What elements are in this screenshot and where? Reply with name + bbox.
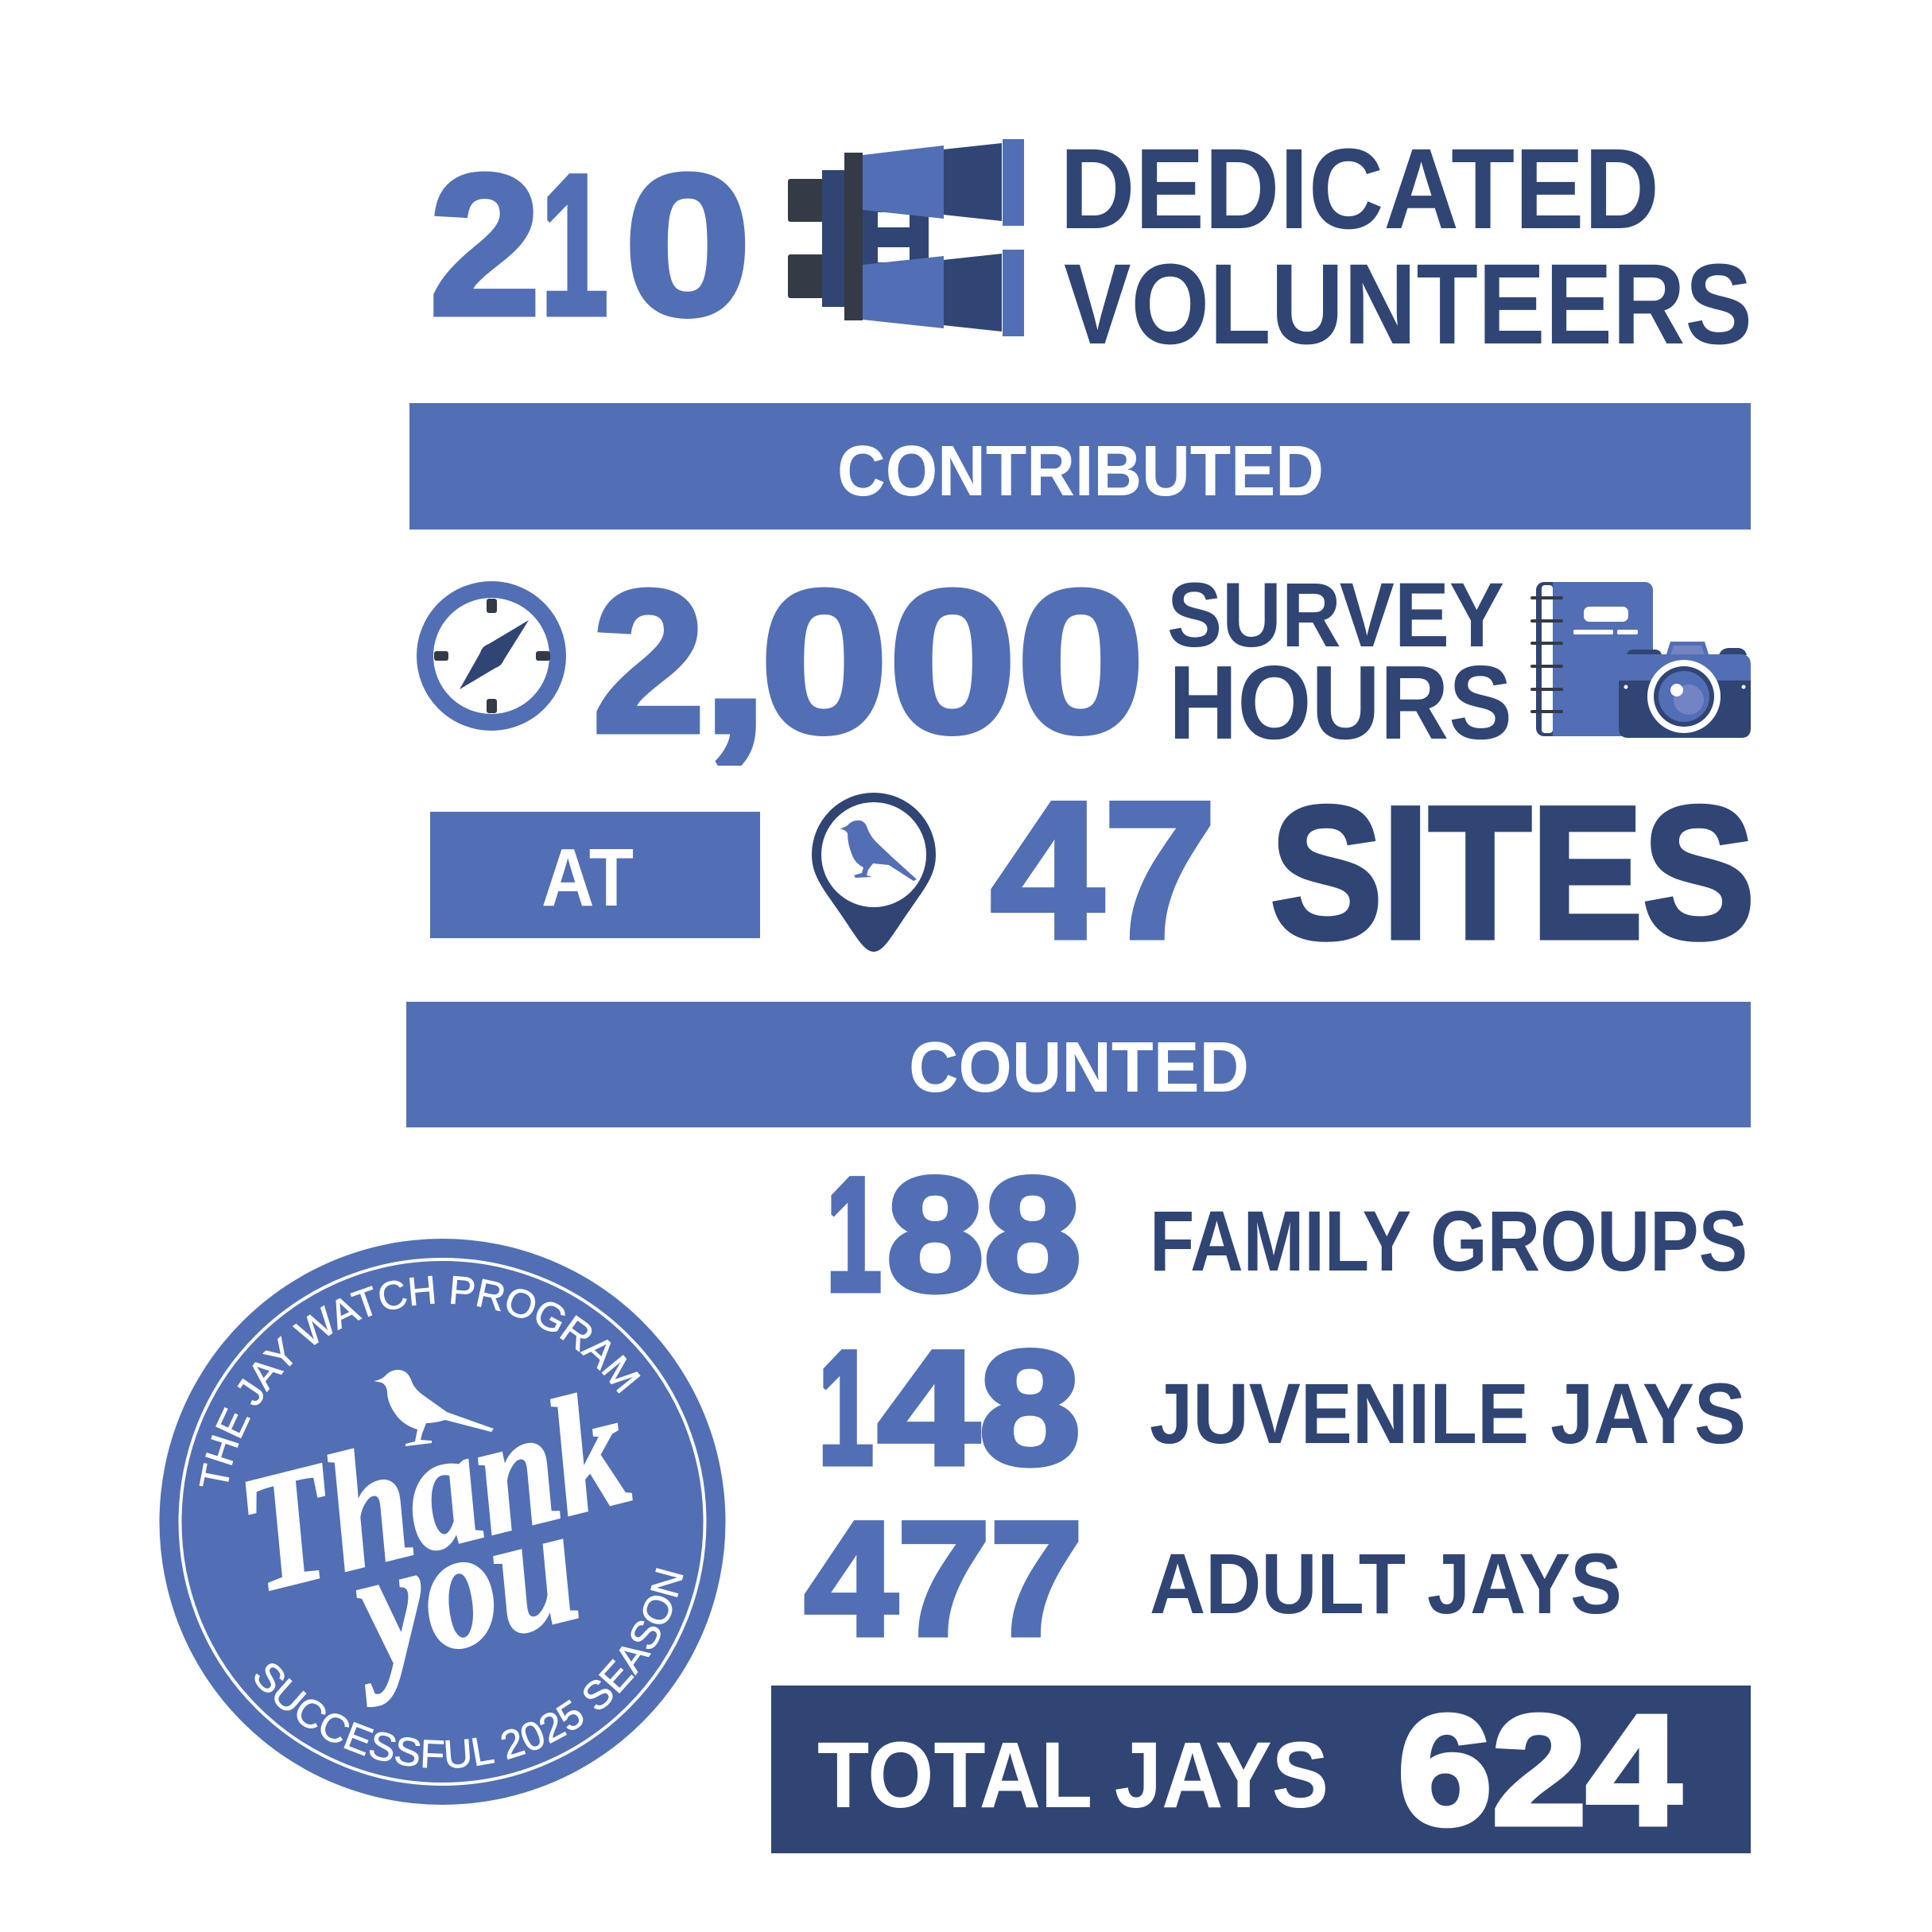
label: survey hours: HOURS [1169,644,1512,761]
script: thank: Thank [223,1355,646,1628]
label: survey hours [1167,564,1512,761]
icon: compass [425,590,558,722]
seal text: successful 2025 season: SUCCESSFUL 2025 SEASON [254,1568,684,1768]
number: 47: 47 [991,761,1216,979]
label: survey hours: SURVEY [1167,564,1504,666]
number: 2,000: 000 [760,549,1145,775]
icon: binoculars [788,139,1024,336]
banner: total jays: TOTAL JAYS [817,1723,1329,1828]
stat: juvenile jays: JUVENILE JAYS [1150,1365,1746,1461]
banner: contributed [409,403,1751,530]
stat: adult jays [805,1488,1622,1670]
number: 210 [429,134,751,357]
banner: total jays [771,1683,1751,1857]
number: 210: 0 [624,134,751,357]
icon: bird silhouette [374,1370,494,1446]
icon: location pin with bird [812,793,936,952]
stat: adult jays: ADULT JAYS [1150,1535,1622,1631]
badge: thank you seal [159,1239,725,1805]
label: dedicated volunteers: DEDICATED [1060,125,1659,253]
icon: notebook [1532,582,1653,736]
banner: counted [406,1002,1751,1127]
panel: volunteers row [429,125,1752,368]
stat: family groups: 88 [886,1144,1081,1325]
stat: family groups: 1 [826,1144,882,1325]
banner: contributed: CONTRIBUTED [837,432,1324,511]
panel: sites row [430,761,1755,979]
panel: survey hours row [425,549,1751,775]
number: 210: 2 [429,134,541,357]
banner: total jays: 624 [1398,1683,1681,1857]
number: 2,000 [592,549,1145,775]
label: dedicated volunteers: VOLUNTEERS [1064,240,1752,368]
label: sites: SITES [1271,768,1755,978]
script: you: you [322,1467,595,1708]
stat: juvenile jays: 1 [818,1317,874,1499]
banner: at [430,812,760,938]
label: dedicated volunteers [1060,125,1752,368]
seal text: the jay watch program: THE JAY WATCH PROGRAM [199,1275,641,1487]
stat: juvenile jays: 48 [878,1317,1080,1499]
stat: family groups: FAMILY GROUPS [1150,1193,1748,1289]
stat: family groups [826,1144,1748,1325]
stat: adult jays: 477 [805,1488,1083,1670]
stat: juvenile jays [818,1317,1746,1499]
banner: counted: COUNTED [909,1028,1249,1108]
banner: at: AT [541,832,634,923]
panel: counts list [771,1144,1751,1857]
number: 2,000: , [701,549,769,775]
icon: camera [1619,642,1751,738]
number: 210: 1 [541,134,608,357]
number: 2,000: 2 [592,549,705,775]
